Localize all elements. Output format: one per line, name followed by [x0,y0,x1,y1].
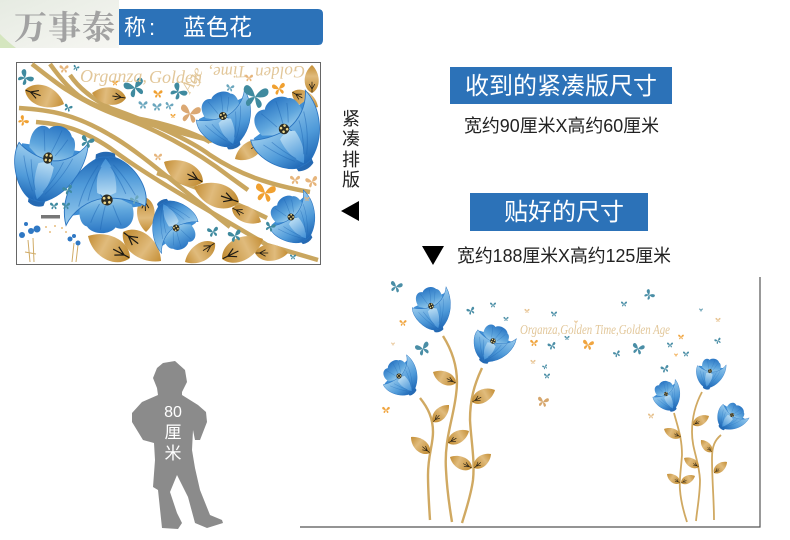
golden leaves [22,65,322,270]
vertical label: compact layout: 排 [342,150,360,170]
wall decal: left flower group [375,282,519,523]
script lettering: Age [177,63,207,97]
butterflies [15,65,319,259]
height label: 80 [164,404,182,421]
wall decal: script lettering: Organza,Golden Time,Golden Age [520,323,670,338]
watermark logo: 万事泰 [14,2,116,49]
title bar: 蓝色花 [183,14,252,40]
heading: applied size [470,193,648,231]
text: applied dimensions: 宽约188厘米X高约125厘米 [457,246,671,266]
blue flowers [3,82,341,259]
script lettering [80,62,306,97]
vertical label: compact layout: 版 [342,170,360,190]
heading: applied size: 贴好的尺寸 [504,199,624,226]
vertical label: compact layout [342,109,360,190]
miniature preview [19,215,80,262]
vertical label: compact layout: 紧 [342,109,360,129]
arrow: down triangle [422,246,444,265]
wall frame [300,277,760,527]
script lettering: Golden [255,62,306,83]
human silhouette [132,361,223,529]
panel: compact sheet layout [3,62,341,270]
title bar: : [149,15,155,40]
wall decal: right flower group [648,356,752,522]
wall decal: butterflies [382,281,722,418]
text: compact dimensions: 宽约90厘米X高约60厘米 [464,116,659,136]
height label: 米 [164,444,182,463]
heading: compact size [450,67,672,104]
height label: 厘 [164,423,182,442]
title bar [119,9,323,45]
heading: compact size: 收到的紧凑版尺寸 [465,73,657,100]
title bar: 称 [124,15,146,40]
golden stems [19,64,318,260]
script lettering: Golden [149,67,202,87]
arrow: left triangle [341,201,359,221]
height label [164,404,182,463]
script lettering: Organza, [80,66,147,86]
vertical label: compact layout: 凑 [342,129,360,149]
script lettering: Time, [209,62,247,82]
